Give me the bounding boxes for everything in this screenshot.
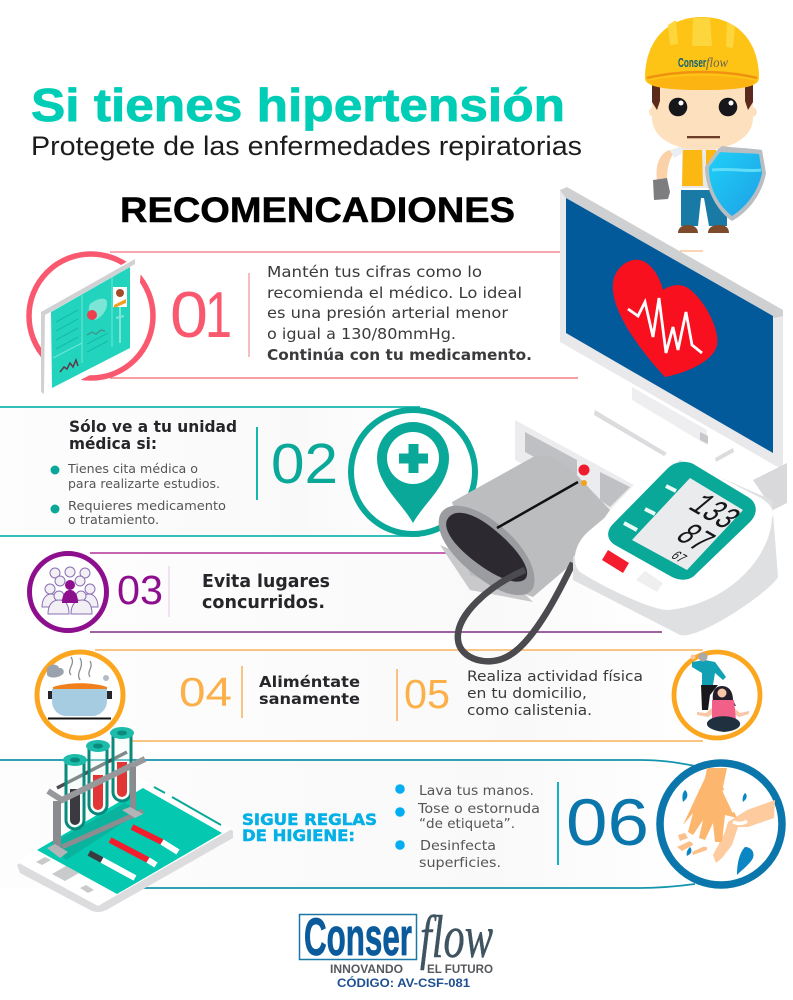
monitor display panel: 67 <box>666 549 690 566</box>
illustration: test tubes on phone <box>17 727 233 912</box>
bullet list 06: Desinfecta <box>420 838 496 854</box>
number 01 <box>170 278 232 351</box>
text block 03: Evita lugares <box>202 572 330 592</box>
text block 01 <box>267 263 532 364</box>
panel 02: unidad médica <box>0 407 475 536</box>
panel 03: lugares concurridos <box>30 553 662 632</box>
number 02: 02 <box>271 432 338 496</box>
bullet list 02: Requieres medicamento <box>68 499 226 513</box>
heading 06: DE HIGIENE: <box>242 826 355 845</box>
icon: crowd <box>30 554 106 630</box>
number 01: 1 <box>205 278 232 351</box>
text block 01: es una presión arterial menor <box>267 304 509 322</box>
heart on screen <box>613 260 717 377</box>
logo: conserflow: flow <box>420 904 493 970</box>
panel 04 and 05 <box>37 650 760 741</box>
test tube red 2 <box>110 727 134 801</box>
icon: cooking pot <box>37 652 123 738</box>
test tube dark <box>63 754 87 829</box>
illustration: blood pressure cuff <box>439 455 610 661</box>
text block 03 <box>202 572 330 613</box>
bullet list 02: Tienes cita médica o <box>67 462 198 476</box>
text block 01: o igual a 130/80mmHg. <box>267 325 456 343</box>
number 03: 03 <box>117 567 163 613</box>
helmet logo: flow <box>706 56 729 71</box>
helmet logo: Conser <box>678 55 706 70</box>
red button <box>602 550 629 573</box>
logo: conserflow: EL FUTURO <box>427 962 493 976</box>
subtitle: Protegete de las enfermedades repiratorias <box>31 131 582 161</box>
test tube red 1 <box>86 740 110 814</box>
heading 02 <box>69 417 237 453</box>
heading 06 <box>242 810 377 845</box>
text block 05: en tu domicilio, <box>467 686 587 702</box>
number 01: 0 <box>170 278 208 351</box>
bullet list 06: “de etiqueta”. <box>419 816 515 832</box>
panel 06: higiene <box>0 760 782 888</box>
bullet list 06: Tose o estornuda <box>417 801 540 817</box>
icon: location pin <box>351 410 475 534</box>
text block 01: Continúa con tu medicamento. <box>267 346 532 364</box>
monitor display panel <box>608 462 756 580</box>
icon: pink ring <box>29 254 153 378</box>
heading 02: médica si: <box>69 434 157 453</box>
text block 04 <box>259 673 360 708</box>
icon: washing hands <box>660 763 782 885</box>
bullet list 02: o tratamiento. <box>68 513 159 527</box>
heading 06: SIGUE REGLAS <box>242 810 377 829</box>
number 05: 05 <box>404 671 450 717</box>
heading: recomendaciones: RECOMENCADIONES <box>120 191 515 230</box>
monitor display panel: 87 <box>665 519 722 560</box>
logo: conserflow: INNOVANDO <box>330 962 403 976</box>
bullet list 02 <box>50 462 226 527</box>
number 06: 06 <box>566 785 649 859</box>
title: Si tienes hipertensión <box>31 79 565 131</box>
icon: exercising people <box>674 652 760 738</box>
illustration: computer monitor with heart <box>560 187 783 470</box>
text block 05: como calistenia. <box>467 703 592 719</box>
text block 01: Mantén tus cifras como lo <box>267 263 482 281</box>
bullet list 02: para realizarte estudios. <box>68 477 220 491</box>
bullet list 06: Lava tus manos. <box>419 783 534 799</box>
illustration: keyboard and tower <box>515 410 787 510</box>
illustration: blood pressure monitor <box>573 460 778 635</box>
illustration: worker with shield <box>645 17 766 233</box>
bullet list 06: superficies. <box>419 855 501 871</box>
bullet list 06 <box>395 783 540 871</box>
document code: CÓDIGO: AV-CSF-081 <box>337 975 470 990</box>
heading 02: Sólo ve a tu unidad <box>69 417 237 436</box>
text block 05 <box>467 669 643 719</box>
logo: conserflow: Conser <box>304 908 412 967</box>
white button <box>636 571 663 592</box>
panel 01: cifras <box>29 251 703 398</box>
icon: medical chart tablet <box>38 256 141 398</box>
text block 04: Aliméntate <box>259 673 360 691</box>
text block 03: concurridos. <box>202 593 325 613</box>
text block 01: recomienda el médico. Lo ideal <box>267 284 522 302</box>
text block 05: Realiza actividad física <box>467 669 643 685</box>
blood pressure readings: 133 <box>678 489 747 537</box>
text block 04: sanamente <box>259 690 360 708</box>
number 04: 04 <box>179 669 232 715</box>
